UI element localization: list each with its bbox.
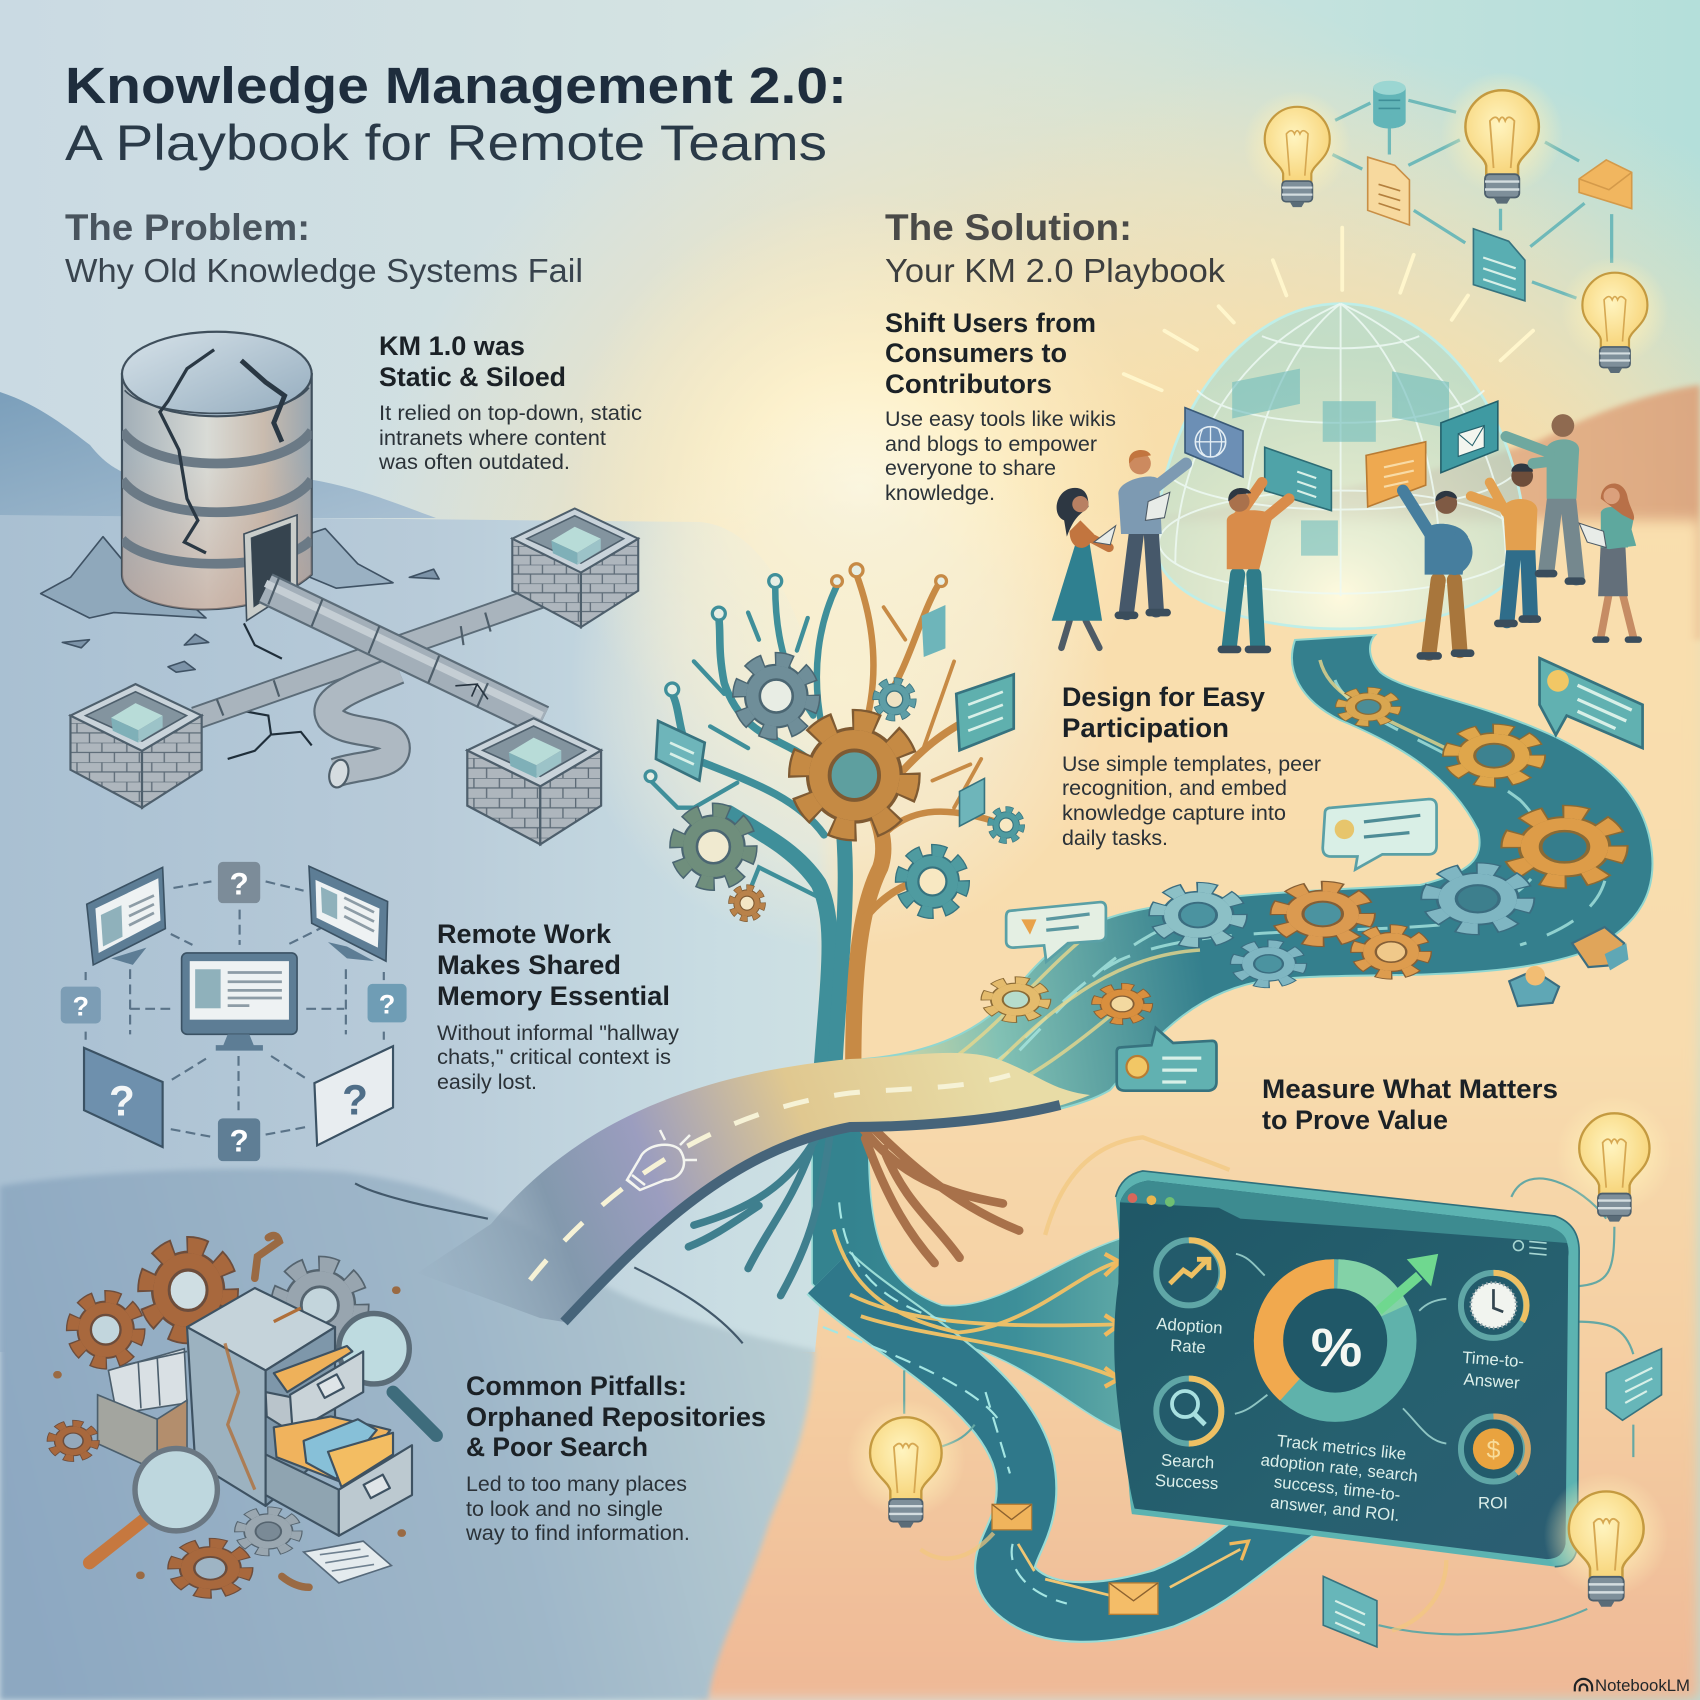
icon: database	[1373, 81, 1406, 128]
text: shift users: Contributors	[885, 369, 1052, 399]
callout: bulb bubble	[1323, 799, 1437, 870]
nodes	[645, 564, 947, 782]
icon: orange document	[1368, 157, 1409, 225]
text: remote work: chats," critical context is	[437, 1045, 671, 1069]
bezel edge	[1116, 1171, 1579, 1567]
text: common pitfalls: Common Pitfalls:	[466, 1371, 687, 1401]
metric: time to answer: Answer	[1463, 1370, 1521, 1393]
icon: big orange gear	[800, 721, 909, 830]
icon: card right	[956, 674, 1014, 750]
text: common pitfalls: Led to too many places	[466, 1472, 687, 1496]
text: measure what matters	[1262, 1074, 1558, 1135]
icon: bulb upper right	[1556, 1096, 1673, 1222]
icon: teal document	[1473, 229, 1525, 301]
icon: question box right	[368, 984, 407, 1022]
text: design for easy participation: recognition, and embed	[1062, 776, 1287, 800]
icon: rubble	[41, 529, 439, 672]
icon: rusty gear small	[73, 1297, 138, 1363]
ground cracks	[228, 623, 312, 759]
metric: roi: ROI	[1478, 1494, 1508, 1513]
text: common pitfalls	[465, 1371, 766, 1545]
text: design for easy participation: daily tasks.	[1062, 826, 1168, 850]
icon: magnifier front	[89, 1448, 217, 1563]
callout: award bubble	[1540, 658, 1643, 748]
text: common pitfalls: way to find information.	[465, 1521, 690, 1545]
connector ticks	[1235, 1254, 1446, 1444]
text: shift users: everyone to share	[885, 456, 1056, 480]
lower channels to dashboard	[812, 1121, 1311, 1612]
text: remote work: Remote Work	[437, 919, 611, 949]
brand: notebooklm: NotebookLM	[1595, 1676, 1690, 1695]
icon: rusty gear large	[146, 1246, 230, 1335]
heading: the problem: Why Old Knowledge Systems Fail	[65, 252, 583, 289]
text: remote work: Memory Essential	[437, 981, 670, 1011]
text: remote work: Makes Shared	[437, 950, 621, 980]
person: woman with tablet	[1052, 488, 1116, 648]
person: man in teal	[1506, 414, 1582, 581]
icon: brick silo bottom	[467, 718, 601, 844]
illustration: orphaned filing cabinet	[51, 1183, 743, 1593]
text: measure what matters: to Prove Value	[1262, 1105, 1448, 1135]
icon: monitor top right	[309, 866, 388, 961]
text: design for easy participation: Participation	[1062, 713, 1229, 743]
person: man raising hand	[1118, 450, 1186, 615]
icon: menu	[1514, 1241, 1547, 1255]
gears on the river	[987, 658, 1643, 1091]
text: dashboard note: adoption rate, search	[1260, 1450, 1419, 1486]
illustration: disconnected remote workers network	[61, 862, 407, 1161]
icon: monitor top left	[87, 867, 165, 965]
illustration: cracked silo and pipes	[41, 332, 638, 844]
icon: grey gear	[740, 660, 813, 732]
icon: magnifier back	[339, 1313, 436, 1435]
person: man with orange sweater	[1221, 482, 1289, 649]
person: woman at right	[1579, 483, 1639, 640]
icon: lightbulb on road	[627, 1130, 697, 1190]
metric: time to answer	[1460, 1273, 1527, 1393]
heading: the problem: The Problem:	[65, 207, 310, 248]
floating cards back	[1232, 369, 1449, 556]
icon: gold gear mid	[1451, 729, 1537, 782]
icon: question box top	[218, 862, 260, 903]
network links	[1332, 100, 1612, 298]
text: dashboard note: answer, and ROI.	[1269, 1493, 1401, 1525]
icon: question box left	[61, 987, 101, 1023]
illustration: dome and contributors	[1052, 72, 1669, 656]
icon: brick silo right	[512, 508, 638, 627]
icon: grey gear back	[279, 1264, 361, 1346]
text: shift users: Shift Users from	[885, 308, 1096, 338]
text: km 1.0: intranets where content	[379, 426, 606, 450]
debris	[57, 1236, 402, 1587]
icon: puzzle pieces	[1509, 927, 1628, 1006]
metric: roi: $	[1487, 1436, 1501, 1464]
icon: flat gears on floor	[51, 1424, 297, 1593]
metric: search success: Success	[1154, 1471, 1219, 1493]
icon: orange gear small	[1357, 929, 1425, 975]
icon: question box bottom	[218, 1118, 260, 1161]
person: man in blue reaching	[1403, 491, 1471, 656]
roots	[688, 1128, 1019, 1296]
metric: adoption rate: Adoption	[1156, 1314, 1223, 1338]
icon: orange small gear	[732, 888, 762, 919]
icon: paper box	[98, 1349, 187, 1471]
icon: paper sheet	[304, 1541, 391, 1583]
icon: envelope left	[992, 1504, 1032, 1530]
metric: search success	[1154, 1379, 1221, 1493]
text: shift users: Consumers to	[885, 338, 1067, 368]
dashed links	[86, 881, 384, 1137]
icon: question box bottom: ?	[229, 1123, 249, 1158]
icon: notebooklm logo	[1575, 1679, 1592, 1691]
icon: question box right: ?	[379, 989, 395, 1020]
icon: text card orange	[1366, 442, 1426, 507]
text: remote work	[437, 919, 679, 1094]
top bar	[1120, 1181, 1567, 1243]
heading: the solution	[885, 207, 1226, 289]
icon: filing cabinet	[187, 1288, 412, 1536]
screen	[1114, 1181, 1569, 1559]
text: design for easy participation: knowledge capture into	[1062, 801, 1286, 825]
icon: orange gear low	[1097, 987, 1148, 1021]
metric: roi	[1461, 1416, 1528, 1513]
icon: teal gear small	[1237, 944, 1300, 984]
golden branches	[853, 575, 1003, 1068]
window dots	[1128, 1193, 1175, 1207]
icon: orange envelope	[1579, 160, 1632, 209]
text: km 1.0: It relied on top-down, static	[379, 401, 642, 425]
icon: orange gear large	[1512, 812, 1617, 881]
text: shift users: Use easy tools like wikis	[885, 407, 1116, 431]
icon: bulb two	[1441, 72, 1563, 204]
text: km 1.0	[378, 331, 642, 474]
dome	[1156, 304, 1525, 629]
metric: time to answer: Time-to-	[1462, 1348, 1525, 1371]
tree with gears	[645, 564, 1022, 1296]
icon: white panel question	[314, 1046, 393, 1145]
icon: orange gear centre	[1279, 887, 1366, 941]
person: man in orange gesturing	[1471, 463, 1537, 623]
glow lines	[920, 1137, 1446, 1631]
icon: bulb one	[1243, 91, 1351, 207]
heading: the problem	[65, 207, 583, 289]
icon: gold gear low	[987, 981, 1045, 1019]
text: shift users	[885, 308, 1116, 505]
icon: globe card	[1185, 408, 1243, 477]
silo body	[122, 332, 312, 621]
icon: bulb three	[1561, 256, 1669, 373]
metric: adoption rate	[1154, 1240, 1223, 1358]
icon: brick silo left	[70, 684, 202, 808]
text: remote work: Without informal "hallway	[437, 1021, 679, 1045]
icon: teal gear centre	[1157, 888, 1239, 942]
heading: the solution: The Solution:	[885, 207, 1132, 248]
icon: bulb left	[846, 1399, 965, 1528]
percent: %	[1311, 1318, 1362, 1378]
icon: note bottom	[1323, 1576, 1377, 1647]
text: shift users: and blogs to empower	[885, 432, 1097, 456]
links to satellites	[904, 1178, 1633, 1634]
text: km 1.0: KM 1.0 was	[379, 331, 525, 361]
text: measure what matters: Measure What Matters	[1262, 1074, 1558, 1104]
icon: mail card	[1441, 401, 1498, 473]
text: dashboard note: success, time-to-	[1273, 1472, 1401, 1505]
text: design for easy participation	[1062, 682, 1321, 850]
callout: award teal bubble	[1117, 1028, 1216, 1091]
icon: pipe end	[326, 758, 351, 790]
text: design for easy participation: Design for Easy	[1062, 682, 1265, 712]
icon: note right	[1606, 1349, 1662, 1420]
icon: question box top: ?	[229, 866, 249, 901]
text: km 1.0: was often outdated.	[378, 450, 570, 474]
icon: envelope bottom	[1109, 1583, 1158, 1614]
icon: text card teal	[1265, 447, 1331, 511]
text: common pitfalls: Orphaned Repositories	[466, 1402, 766, 1432]
icon: right teal gear	[901, 850, 963, 912]
icon: center monitor	[182, 953, 297, 1051]
icon: blank panel question	[84, 1048, 163, 1147]
title	[65, 57, 847, 171]
text: shift users: knowledge.	[885, 481, 995, 505]
icon: teal gear right	[1430, 869, 1525, 929]
bezel	[1116, 1171, 1579, 1567]
rays	[1124, 228, 1533, 390]
arrow: growth	[1379, 1254, 1438, 1311]
icon: gold gear top	[1341, 691, 1396, 723]
dashboard panel	[846, 1096, 1673, 1691]
pipes	[195, 577, 550, 772]
metric: search success: Search	[1161, 1451, 1215, 1472]
text: km 1.0: Static & Siloed	[379, 362, 566, 392]
text: dashboard note: Track metrics like	[1276, 1431, 1407, 1464]
icon: far right gear	[991, 810, 1022, 841]
callout: orange icon bubble	[1006, 902, 1106, 962]
text: dashboard note	[1256, 1430, 1421, 1527]
heading: the solution: Your KM 2.0 Playbook	[885, 252, 1226, 289]
road	[417, 1053, 1090, 1322]
flowing knowledge river	[850, 635, 1652, 1127]
icon: question box left: ?	[72, 990, 89, 1021]
text: remote work: easily lost.	[437, 1070, 537, 1094]
icon: teal orange gear	[677, 810, 750, 883]
icon: white panel question: ?	[342, 1077, 368, 1124]
icon: bulb lower right	[1544, 1473, 1669, 1607]
title: Knowledge Management 2.0:	[65, 57, 847, 114]
ground crack lines	[355, 1183, 743, 1343]
text: common pitfalls: & Poor Search	[466, 1432, 648, 1462]
icon: teal gear small	[876, 681, 913, 718]
metric: adoption rate: Rate	[1170, 1336, 1206, 1357]
icon: card left	[656, 721, 705, 781]
icon: card top	[922, 605, 945, 657]
text: design for easy participation: Use simple templates, peer	[1062, 752, 1321, 776]
teal branches	[651, 585, 845, 1068]
title: A Playbook for Remote Teams	[65, 115, 827, 171]
text: common pitfalls: to look and no single	[466, 1497, 663, 1521]
icon: blank panel question: ?	[109, 1078, 135, 1125]
icon: card small	[960, 778, 984, 826]
donut chart	[1269, 1274, 1401, 1407]
